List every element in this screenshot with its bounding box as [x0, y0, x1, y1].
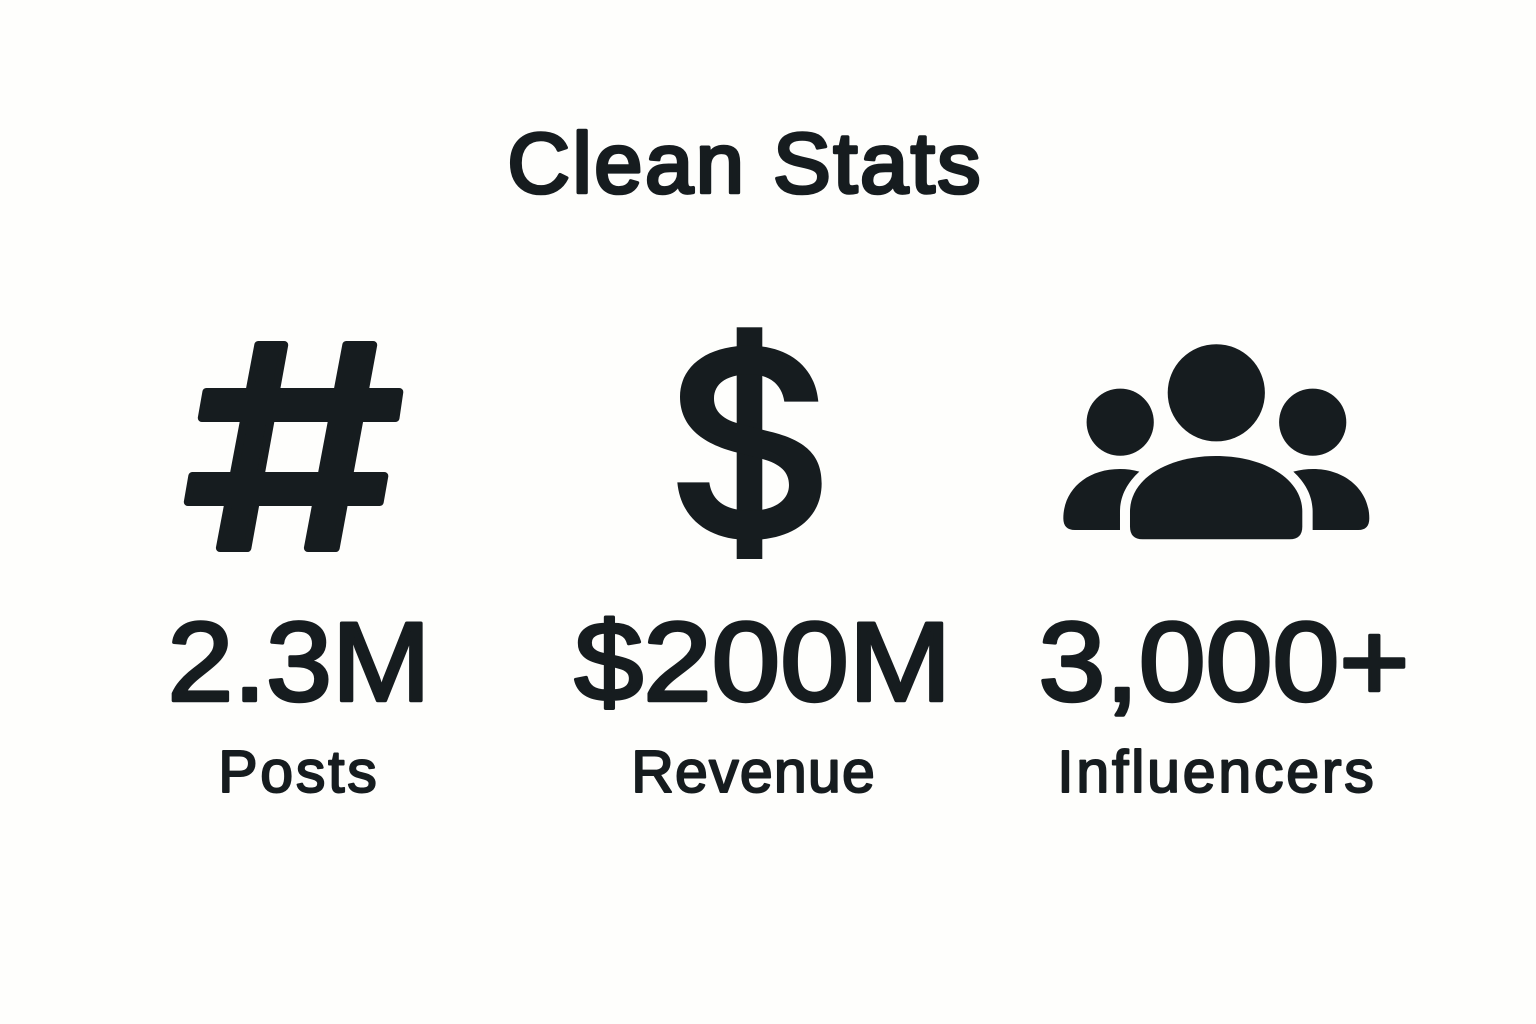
label: Influencers: Influencers	[1057, 739, 1374, 805]
panel: revenue	[574, 327, 952, 805]
label: Revenue: Revenue	[631, 739, 875, 805]
icon: people group	[1063, 344, 1369, 539]
panel: posts	[168, 345, 430, 805]
panel: influencers	[1038, 344, 1410, 805]
stat: $200M: $200M	[574, 599, 952, 724]
stat: 2.3M: 2.3M	[168, 599, 430, 724]
stat: 3,000+: 3,000+	[1038, 599, 1410, 724]
label: Posts: Posts	[218, 739, 377, 805]
title: Clean Stats	[507, 116, 981, 212]
icon: dollar	[677, 327, 822, 559]
icon: hash	[188, 345, 399, 548]
